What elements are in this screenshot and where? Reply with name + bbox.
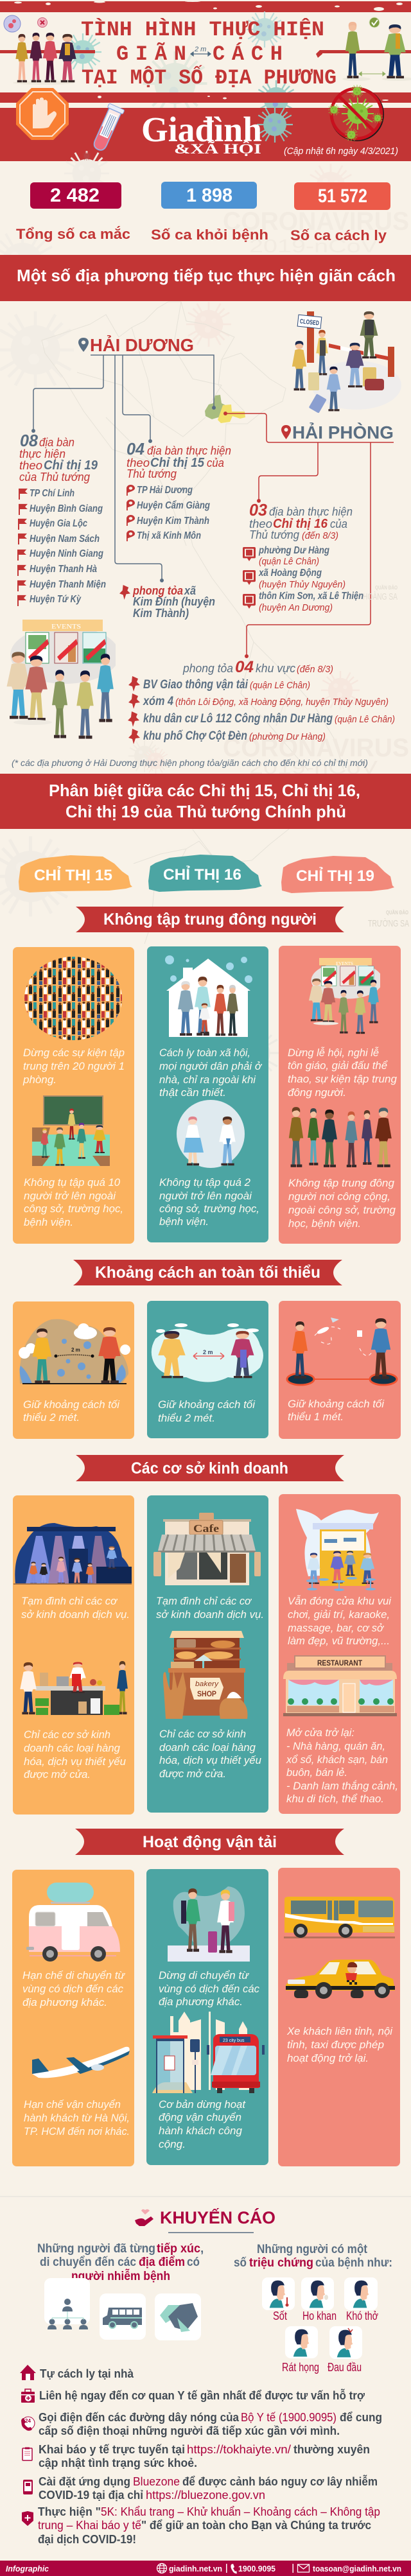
text block: contacts: người nhiễm bệnh	[71, 2269, 170, 2283]
illustration: closed checkpoint	[292, 311, 401, 413]
text block: Hải Dương Chỉ thị 19 list: địa bàn	[39, 436, 74, 449]
symptom: headache	[328, 2326, 362, 2374]
map label: Hoàng Sa	[363, 584, 398, 602]
text block: Hải Phòng lockdown list: phong tỏa	[182, 662, 233, 675]
illustration: bar	[296, 1509, 379, 1591]
symptom: fever	[262, 2277, 295, 2322]
panel: Không tập trung - Chỉ thị 19: thao, sự kiện tập trung	[288, 1073, 398, 1085]
text block: Hải Dương Chỉ thị 19 list: TP Chí Linh	[30, 488, 74, 499]
title: TẠI MỘT SỐ ĐỊA PHƯƠNG	[82, 65, 337, 90]
text block: Hải Phòng lockdown list: BV Giao thông vận tải	[143, 678, 249, 692]
illustration: crowd	[24, 957, 122, 1040]
panel: Cơ sở kinh doanh - Chỉ thị 15: doanh các loại hàng	[24, 1742, 121, 1754]
illustration: masked kids	[177, 1100, 245, 1168]
ribbon: Hoạt động vận tải	[75, 1829, 344, 1855]
text block: symptoms: của bệnh như:	[315, 2256, 392, 2270]
panel: Cơ sở kinh doanh - Chỉ thị 19: - Danh lam thắng cảnh,	[286, 1780, 398, 1792]
stat: total cases: Tổng số ca mắc	[16, 226, 130, 242]
advice: 5K: 5K: Khẩu trang – Khử khuẩn – Khoảng cách – Không tập	[101, 2505, 380, 2518]
coronavirus watermark text: 2019-nCoV	[249, 758, 378, 778]
advice: medical declaration	[22, 2443, 370, 2469]
panel: Vận tải - Chỉ thị 19: hoạt động trở lại.	[287, 2052, 369, 2064]
panel: Vận tải - Chỉ thị 16: Dừng di chuyển từ	[159, 1969, 249, 1981]
icon: telephone	[231, 2564, 237, 2573]
text block: Hải Dương Chỉ thị 19 list: Chỉ thị 19	[44, 458, 98, 473]
illustration: family at home	[165, 955, 252, 1037]
illustration: people with masks	[289, 1107, 392, 1167]
torn top red band	[0, 1, 411, 12]
callout: phong tỏa Kim Đính: Kim Đính (huyện	[133, 595, 215, 608]
text block: Hải Phòng lockdown list: (đến 8/3)	[297, 664, 333, 675]
text block: Hải Phòng Chỉ thị 16 list: địa bàn thực hiện	[269, 505, 353, 518]
panel: Cơ sở kinh doanh - Chỉ thị 19: chơi, giải trí, karaoke,	[288, 1608, 390, 1621]
illustration: two people keeping distance	[342, 17, 411, 81]
text block: Hải Phòng Chỉ thị 16 list: (huyện Thủy Nguyên)	[259, 579, 345, 590]
text block: symptoms: Những người có một	[257, 2243, 368, 2256]
illustration: restaurant	[283, 1656, 397, 1716]
text block: Hải Phòng Chỉ thị 16 list: (huyện An Dương)	[259, 602, 333, 613]
text block: Hải Dương Chỉ thị 19 list: Huyện Bình Giang	[30, 503, 103, 514]
panel: Cơ sở kinh doanh - Chỉ thị 16: được mở cửa.	[159, 1768, 226, 1780]
panel: Cơ sở kinh doanh - Chỉ thị 15: được mở cửa.	[24, 1768, 91, 1780]
advice: self isolate: Tự cách ly tại nhà	[40, 2367, 134, 2380]
coronavirus watermark text: CORONAVIRUS	[223, 734, 409, 762]
panel: Không tập trung - Chỉ thị 16: công sở, trường học,	[159, 1203, 259, 1215]
text block: Hải Phòng lockdown list: (thôn Lôi Động, xã Hoàng Động, huyện Thủy Nguyên)	[175, 697, 389, 708]
illustration: group of people	[4, 15, 76, 85]
text block: Hải Phòng Chỉ thị 16 list: (quận Lê Chân)	[259, 556, 319, 567]
panel: Cơ sở kinh doanh - Chỉ thị 19: làm đẹp, vũ trường,...	[288, 1635, 390, 1647]
footer: toasoan@giadinh.net.vn	[313, 2564, 401, 2573]
label: Chỉ thị 16	[148, 855, 262, 892]
text block: contacts	[37, 2242, 204, 2283]
illustration: closed checkpoint: CLOSED	[299, 318, 319, 327]
ribbon: Không tập trung đông người: Không tập trung đông người	[103, 910, 317, 928]
panel: Cơ sở kinh doanh - Chỉ thị 19: Mở cửa trở lại:	[286, 1727, 354, 1739]
footer: giadinh.net.vn	[169, 2564, 222, 2573]
panel: Khoảng cách - Chỉ thị 16: Giữ khoảng cách tối	[158, 1398, 256, 1411]
text block: symptoms: số	[234, 2256, 247, 2270]
illustration: travellers	[168, 1886, 250, 1962]
illustration: taxi	[286, 1960, 395, 1999]
panel: Khoảng cách - Chỉ thị 19: Giữ khoảng cách tối	[288, 1398, 385, 1410]
text block: Hải Dương Chỉ thị 15 list: Chỉ thị 15	[150, 456, 205, 470]
icon: stop hand sign	[16, 88, 69, 140]
footnote: (* các địa phương ở Hải Dương thực hiện phong tỏa/giãn cách cho đến khi có chỉ thị mới)	[12, 758, 368, 768]
icon tile: bus	[100, 2293, 146, 2340]
advice: call hotline: Bộ Y tế (1900.9095)	[241, 2411, 337, 2424]
panel: Vận tải - Chỉ thị 15: TP. HCM đến nơi khác.	[24, 2125, 130, 2137]
label: Chỉ thị 15: CHỈ THỊ 15	[34, 866, 112, 884]
ribbon: Khoảng cách an toàn tối thiểu: Khoảng cách an toàn tối thiểu	[95, 1264, 320, 1282]
illustration: classroom	[32, 1095, 110, 1166]
text block: Hải Dương Chỉ thị 15 list: Thị xã Kinh Môn	[137, 530, 201, 541]
icon: globe	[157, 2563, 167, 2573]
panel: Cơ sở kinh doanh - Chỉ thị 16	[147, 1495, 268, 1813]
icon: envelope	[298, 2564, 310, 2572]
panel: Khoảng cách - Chỉ thị 19	[279, 1301, 401, 1439]
advice: Bluezone: Bluezone	[133, 2475, 180, 2488]
text block: Hải Dương Chỉ thị 19 list: Huyện Gia Lộc	[30, 518, 87, 529]
map label: Hoàng Sa: QUẦN ĐẢO	[375, 584, 398, 591]
text block: Hải Phòng Chỉ thị 16 list	[243, 500, 363, 613]
panel: Khoảng cách - Chỉ thị 15: Giữ khoảng cách tối	[23, 1398, 120, 1411]
heading: Khuyến cáo: KHUYẾN CÁO	[160, 2207, 275, 2227]
footer: Infographic	[6, 2564, 49, 2573]
panel: Vận tải - Chỉ thị 16: Cơ bản dừng hoạt	[159, 2098, 246, 2110]
text block: contacts: Những người đã từng	[37, 2242, 155, 2256]
panel: Cơ sở kinh doanh - Chỉ thị 15	[13, 1495, 134, 1815]
stat: recovered: Số ca khỏi bệnh	[151, 227, 268, 243]
panel: Cơ sở kinh doanh - Chỉ thị 19: massage, bar, cơ sở	[288, 1622, 385, 1634]
red torn band	[0, 92, 411, 103]
text block: contacts: địa điểm	[139, 2256, 185, 2269]
illustration: cancelled events small	[309, 958, 383, 1034]
illustration: cancelled events: EVENTS	[51, 623, 81, 631]
header banner	[0, 1, 411, 196]
panel: Cơ sở kinh doanh - Chỉ thị 15: sở kinh doanh dịch vụ.	[21, 1608, 130, 1621]
text block: contacts: tiếp xúc	[157, 2242, 200, 2256]
illustration: bakery shop: SHOP	[197, 1689, 216, 1698]
text block: Hải Phòng lockdown list: khu phố Chợ Cột Đèn	[143, 729, 247, 743]
text block: Hải Dương Chỉ thị 15 list: địa bàn thực hiện	[147, 444, 231, 457]
panel: Vận tải - Chỉ thị 19: tỉnh, taxi được phép	[287, 2039, 384, 2051]
text block: Hải Dương Chỉ thị 19 list: Huyện Tứ Kỳ	[30, 594, 82, 605]
text block: contacts: có	[187, 2256, 200, 2269]
advice: medical declaration: https://tokhaiyte.vn/	[187, 2443, 291, 2456]
advice: call hotline: cấp số điện thoại những người đã tiếp xúc gần với mình.	[39, 2424, 340, 2437]
advice: Bluezone: https://bluezone.gov.vn	[146, 2489, 265, 2502]
title	[81, 18, 337, 90]
panel: Cơ sở kinh doanh - Chỉ thị 19: xổ số, khách sạn, bán	[286, 1754, 388, 1766]
text block: Hải Dương Chỉ thị 19 list: Huyện Nam Sách	[30, 534, 100, 544]
heading: Hải Dương: HẢI DƯƠNG	[90, 335, 194, 355]
heading: comparison band	[0, 774, 411, 829]
panel: Vận tải - Chỉ thị 15: địa phương khác.	[22, 1996, 107, 2008]
illustration: two metres with viruses: 2 m	[71, 1347, 80, 1353]
panel: Vận tải - Chỉ thị 19	[278, 1868, 400, 2166]
ribbon: Khoảng cách an toàn tối thiểu	[73, 1260, 342, 1285]
symptom: breathlessness	[344, 2277, 378, 2322]
panel: Cơ sở kinh doanh - Chỉ thị 16: Tạm đình chỉ các cơ	[156, 1595, 252, 1607]
illustration: bus stop: 23 city bus	[223, 2039, 245, 2043]
symptom: headache: Đau đầu	[328, 2361, 362, 2374]
icon: no virus sign	[328, 85, 383, 141]
illustration: cafe shopfront: Cafe	[193, 1522, 220, 1535]
advice: medical declaration: cập nhật tình trạng sức khoẻ.	[39, 2457, 197, 2469]
panel: Không tập trung - Chỉ thị 19: người nơi công cộng,	[288, 1190, 390, 1203]
text block: Hải Phòng lockdown list: khu vực	[256, 662, 295, 675]
panel: Khoảng cách - Chỉ thị 15: thiểu 2 mét.	[23, 1411, 80, 1423]
panel: Cơ sở kinh doanh - Chỉ thị 19: - Nhà hàng, quán ăn,	[286, 1740, 385, 1752]
text block: Hải Dương Chỉ thị 19 list: Huyện Ninh Giang	[30, 548, 103, 559]
panel: Cơ sở kinh doanh - Chỉ thị 15: Chỉ các cơ sở kinh	[24, 1728, 110, 1741]
text block: Hải Phòng lockdown list: (phường Dư Hàng)	[249, 731, 326, 742]
panel: Không tập trung - Chỉ thị 15: người trở lên ngoài	[24, 1190, 116, 1202]
symptom: fever: Sốt	[273, 2310, 287, 2322]
icon tile: organisation	[44, 2278, 90, 2329]
panel: Không tập trung - Chỉ thị 15: phòng.	[22, 1074, 57, 1086]
text block: Hải Dương Chỉ thị 15 list: TP Hải Dương	[137, 485, 193, 496]
stat: recovered: 1 898	[186, 185, 232, 206]
stat: quarantined: Số ca cách ly	[290, 227, 387, 243]
title: CÁCH	[213, 42, 283, 66]
icon tile: handshake	[155, 2293, 201, 2340]
panel: Không tập trung - Chỉ thị 19: học, bệnh viện.	[288, 1217, 361, 1230]
title: TÌNH HÌNH THỰC HIỆN	[81, 18, 324, 42]
text block: Hải Phòng Chỉ thị 16 list: Thủ tướng	[249, 528, 299, 541]
text block: Hải Dương Chỉ thị 15 list: Huyện Kim Thành	[137, 516, 209, 527]
text block: Hải Phòng lockdown list: xóm 4	[143, 695, 173, 708]
panel: Không tập trung - Chỉ thị 16: Cách ly toàn xã hội,	[159, 1047, 250, 1059]
advice: medical declaration: Khai báo y tế trực tuyến tại	[39, 2443, 185, 2456]
advice: 5K: trung – Khai báo y tế	[38, 2519, 141, 2532]
text block: Hải Phòng Chỉ thị 16 list: theo	[249, 518, 272, 530]
panel: Khoảng cách - Chỉ thị 16: thiểu 2 mét.	[158, 1412, 215, 1424]
panel: Không tập trung - Chỉ thị 15: Dừng các sự kiện tập	[23, 1047, 125, 1059]
text block: Hải Dương Chỉ thị 19 list: theo	[19, 459, 42, 472]
stat: recovered	[151, 182, 268, 243]
symptom: dry cough: Ho khan	[302, 2310, 337, 2322]
icon: test tube	[90, 103, 125, 153]
text block: Hải Dương Chỉ thị 19 list	[17, 431, 106, 606]
text block: Hải Dương Chỉ thị 19 list: của Thủ tướng	[19, 471, 90, 483]
illustration: bus stop	[152, 2012, 265, 2093]
advice: Bluezone	[23, 2475, 378, 2502]
panel: Vận tải - Chỉ thị 15: hành khách từ Hà Nội,	[24, 2112, 130, 2124]
text block: Hải Dương Chỉ thị 19 list: 08	[20, 431, 39, 450]
label: Chỉ thị 19: CHỈ THỊ 19	[296, 866, 374, 885]
coronavirus watermark text: CORONAVIRUS	[223, 207, 409, 236]
symptom: breathlessness: Khó thở	[346, 2310, 378, 2322]
panel: Vận tải - Chỉ thị 15: vùng có dịch đến các	[22, 1983, 123, 1995]
heading: comparison band: Chỉ thị 19 của Thủ tướng Chính phủ	[66, 802, 346, 821]
panel: Cơ sở kinh doanh - Chỉ thị 16: hóa, dịch vụ thiết yếu	[159, 1754, 262, 1766]
title: GIÃN	[116, 42, 186, 66]
symptom: sore throat	[282, 2326, 319, 2374]
advice: medical declaration: thường xuyên	[293, 2443, 370, 2456]
illustration: one metre apart	[287, 1318, 397, 1385]
panel: Vận tải - Chỉ thị 16	[146, 1869, 268, 2165]
advice: call hotline: Gọi điện đến các đường dây nóng của	[39, 2411, 240, 2424]
panel: Vận tải - Chỉ thị 15: Hạn chế vận chuyển	[24, 2098, 121, 2110]
stats row	[16, 182, 390, 243]
panel: Không tập trung - Chỉ thị 19: tôn giáo, giải đấu thể	[288, 1059, 389, 1072]
panel: Không tập trung - Chỉ thị 16	[147, 946, 268, 1242]
advice: Bluezone: Cài đặt ứng dụng	[39, 2475, 130, 2488]
background watermark viruses and map	[0, 164, 409, 1079]
symptom: sore throat: Rát họng	[282, 2361, 319, 2374]
text block: Hải Phòng Chỉ thị 16 list: phường Dư Hàng	[258, 545, 329, 556]
panel: Cơ sở kinh doanh - Chỉ thị 16: doanh các loại hàng	[159, 1741, 256, 1754]
text block: Hải Dương Chỉ thị 15 list	[127, 439, 231, 541]
icon: 2 m distance arrow	[191, 46, 211, 56]
background viruses in title	[64, 12, 295, 119]
illustration: camper van	[26, 1883, 120, 1962]
text block: Hải Phòng lockdown list: khu dân cư Lô 112 Công nhân Dư Hàng	[143, 712, 333, 726]
stat: total cases: 2 482	[50, 185, 100, 206]
text block: Hải Phòng Chỉ thị 16 list: 03	[249, 500, 268, 519]
text block: Hải Phòng Chỉ thị 16 list: Chỉ thị 16	[273, 517, 328, 531]
update date: (Cập nhật 6h ngày 4/3/2021)	[284, 146, 398, 157]
panel: Không tập trung - Chỉ thị 16: Không tụ tập quá 2	[159, 1176, 251, 1188]
symptom: dry cough	[301, 2277, 337, 2322]
panel: Vận tải - Chỉ thị 16: hành khách công	[159, 2125, 243, 2137]
text block: Hải Dương Chỉ thị 15 list: của	[207, 457, 224, 469]
stat: quarantined	[290, 182, 390, 243]
map label: Trường Sa	[368, 909, 409, 929]
map highlight: Hải Dương and Hải Phòng provinces	[205, 395, 245, 423]
text block: symptoms: triệu chứng	[249, 2256, 313, 2270]
panel: Cơ sở kinh doanh - Chỉ thị 19	[279, 1494, 401, 1814]
illustration: two metres with masks: 2 m	[203, 1349, 213, 1355]
advice: 5K: Thực hiện "	[38, 2505, 101, 2518]
text block: Hải Dương Chỉ thị 15 list: Thủ tướng	[127, 467, 177, 480]
text block: contacts: di chuyển đến các	[40, 2256, 136, 2269]
callout: phong tỏa Kim Đính: phong tỏa	[132, 584, 183, 597]
panel: Khoảng cách - Chỉ thị 19: thiểu 1 mét.	[288, 1411, 344, 1423]
label: Chỉ thị 15	[19, 855, 132, 892]
callout: phong tỏa Kim Đính: Kim Thành)	[133, 607, 189, 620]
illustration: bakery shop	[163, 1631, 247, 1719]
coronavirus watermark text	[223, 207, 409, 778]
panel: Khoảng cách - Chỉ thị 15	[13, 1301, 134, 1439]
panel: red logo area	[0, 108, 411, 161]
coronavirus watermark text: 2019-nCoV	[249, 236, 378, 257]
heading: comparison band: Phân biệt giữa các Chỉ thị 15, Chỉ thị 16,	[49, 781, 360, 800]
icon: 2 m distance arrow: 2 m	[194, 46, 206, 53]
advice: 5K: " để giữ an toàn cho Bạn và Chúng ta trước	[141, 2519, 371, 2532]
panel: Vận tải - Chỉ thị 16: động vận chuyển	[159, 2111, 241, 2123]
illustration: two metres with masks	[152, 1323, 263, 1382]
text block: Hải Phòng lockdown list: 04	[235, 658, 254, 676]
panel: Vận tải - Chỉ thị 15: Hạn chế di chuyển từ	[22, 1969, 125, 1981]
advice: 5K: đại dịch COVID-19!	[38, 2533, 136, 2546]
panel: Không tập trung - Chỉ thị 15	[13, 947, 134, 1244]
panel: Cơ sở kinh doanh - Chỉ thị 19: Vẫn đóng cửa khu vui	[288, 1595, 392, 1607]
heading: localities band	[0, 255, 411, 301]
panel: Không tập trung - Chỉ thị 19: ngoài công sở, trường	[288, 1204, 396, 1216]
panel: Không tập trung - Chỉ thị 16: thật cần thiết.	[159, 1086, 226, 1099]
panel: Vận tải - Chỉ thị 16: vùng có dịch đến các	[159, 1983, 259, 1995]
illustration: cancelled events	[6, 620, 119, 739]
footer: 1900.9095	[238, 2564, 275, 2573]
text block: Hải Phòng lockdown list: (quận Lê Chân)	[250, 680, 310, 691]
ribbon: Hoạt động vận tải: Hoạt động vận tải	[143, 1833, 277, 1851]
panel: Vận tải - Chỉ thị 16: cộng.	[159, 2138, 186, 2150]
advice: Bluezone: để được cảnh báo nguy cơ lây nhiễm	[182, 2475, 378, 2488]
panel: Không tập trung - Chỉ thị 16: nhà, chỉ ra ngoài khi	[159, 1074, 256, 1086]
text block: Hải Phòng Chỉ thị 16 list: xã Hoàng Động	[258, 568, 322, 579]
advice: Bluezone: COVID-19 tại địa chỉ	[39, 2489, 143, 2502]
panel: Vận tải - Chỉ thị 19: Xe khách liên tỉnh, nội	[286, 2025, 393, 2037]
stat: total cases	[16, 182, 130, 242]
panel: Cơ sở kinh doanh - Chỉ thị 15: hóa, dịch vụ thiết yếu	[24, 1755, 127, 1768]
panel: Không tập trung - Chỉ thị 19: Dừng lễ hội, nghi lễ	[288, 1047, 379, 1059]
ribbon: Các cơ sở kinh doanh: Các cơ sở kinh doanh	[131, 1459, 288, 1477]
illustration: yellow coach	[284, 1897, 395, 1938]
panel: Không tập trung - Chỉ thị 15: bệnh viện.	[24, 1216, 73, 1228]
panel: Không tập trung - Chỉ thị 15: công sở, trường học,	[24, 1203, 123, 1215]
advice: call hotline	[21, 2411, 382, 2437]
panel: Cơ sở kinh doanh - Chỉ thị 19: khu di tích, thể thao.	[286, 1793, 384, 1805]
callout: phong tỏa Kim Đính: xã	[184, 584, 196, 597]
text block: Hải Dương Chỉ thị 15 list: Huyện Cẩm Giàng	[137, 500, 210, 511]
advice: self isolate	[20, 2365, 134, 2380]
panel: Không tập trung - Chỉ thị 16: bệnh viện.	[159, 1215, 209, 1228]
heading: localities band: Một số địa phương tiếp tục thực hiện giãn cách	[17, 266, 396, 285]
illustration: restaurant: RESTAURANT	[317, 1658, 363, 1667]
text block: symptoms	[234, 2243, 392, 2270]
text block: Hải Phòng Chỉ thị 16 list: của	[330, 518, 347, 530]
panel: Vận tải - Chỉ thị 16: địa phương khác.	[159, 1996, 243, 2008]
panel: Không tập trung - Chỉ thị 19: Không tập trung đông	[288, 1177, 395, 1189]
text block: Hải Phòng lockdown list	[128, 658, 395, 744]
text block: Hải Phòng lockdown list: (quận Lê Chân)	[335, 714, 395, 725]
panel: Không tập trung - Chỉ thị 16: người trở lên ngoài	[159, 1190, 252, 1202]
logo: Gia đình & Xã hội: &XÃ HỘI	[174, 141, 261, 157]
ribbon: Các cơ sở kinh doanh	[76, 1455, 344, 1481]
label: Chỉ thị 16: CHỈ THỊ 16	[163, 865, 241, 883]
logo: Gia đình & Xã hội: Giađình	[141, 110, 262, 149]
panel: Không tập trung - Chỉ thị 19: đông người.	[288, 1086, 346, 1099]
connectors: Hải Dương lines	[31, 355, 216, 582]
text block: contacts: ,	[200, 2242, 204, 2256]
heading: Hải Phòng: HẢI PHÒNG	[292, 422, 394, 442]
text block: Hải Dương Chỉ thị 15 list: 04	[127, 439, 145, 458]
illustration: bakery shop: bakery	[195, 1680, 220, 1688]
panel: Cơ sở kinh doanh - Chỉ thị 15: Tạm đình chỉ các cơ	[21, 1595, 118, 1607]
panel: Không tập trung - Chỉ thị 15: Không tụ tập quá 10	[24, 1176, 121, 1188]
panel: Không tập trung - Chỉ thị 16: mọi người dân phải ở	[159, 1060, 263, 1072]
illustration: supermarket checkout	[20, 1661, 128, 1715]
illustration: cancelled events small: EVENTS	[336, 961, 353, 966]
footer	[0, 2561, 411, 2576]
text block: Hải Dương Chỉ thị 19 list: thực hiện	[19, 448, 66, 460]
text block: Hải Dương Chỉ thị 19 list: Huyện Thanh Hà	[30, 564, 97, 575]
ribbon: Không tập trung đông người	[76, 907, 344, 932]
label: Chỉ thị 19	[281, 856, 394, 893]
advice: call hotline: 24	[25, 2418, 31, 2424]
panel: Cơ sở kinh doanh - Chỉ thị 19: buôn, bán lẻ.	[286, 1766, 347, 1779]
panel: Vận tải - Chỉ thị 15	[12, 1870, 134, 2166]
advice: 5K	[22, 2505, 380, 2546]
text block: Hải Dương Chỉ thị 15 list: theo	[127, 457, 150, 469]
advice: call hotline: để cung	[340, 2411, 382, 2424]
illustration: two metres with viruses	[19, 1319, 130, 1384]
panel: Không tập trung - Chỉ thị 19	[279, 946, 401, 1244]
text block: Hải Dương Chỉ thị 19 list: Huyện Thanh Miện	[30, 579, 106, 590]
illustration: cafe shopfront	[153, 1513, 261, 1585]
illustration: airplane	[32, 2047, 130, 2078]
text block: Hải Phòng Chỉ thị 16 list: thôn Kim Sơn, xã Lê Thiện	[259, 591, 363, 602]
panel: Không tập trung - Chỉ thị 15: trung trên 20 người 1	[23, 1060, 125, 1072]
connectors: Hải Phòng lines	[223, 412, 394, 658]
advice: contact health agency: Liên hệ ngay đến cơ quan Y tế gần nhất để được tư vấn hỗ trợ	[39, 2389, 365, 2402]
callout: phong tỏa Kim Đính	[119, 584, 215, 620]
text block: Hải Phòng Chỉ thị 16 list: (đến 8/3)	[302, 530, 338, 541]
panel: Khoảng cách - Chỉ thị 16	[147, 1301, 268, 1438]
panel: Cơ sở kinh doanh - Chỉ thị 16: sở kinh doanh dịch vụ.	[156, 1608, 264, 1621]
stat: quarantined: 51 572	[318, 186, 367, 207]
panel: Cơ sở kinh doanh - Chỉ thị 16: Chỉ các cơ sở kinh	[159, 1728, 246, 1740]
illustration: concert hall	[13, 1523, 132, 1585]
icon: hand with heart	[135, 2209, 153, 2226]
